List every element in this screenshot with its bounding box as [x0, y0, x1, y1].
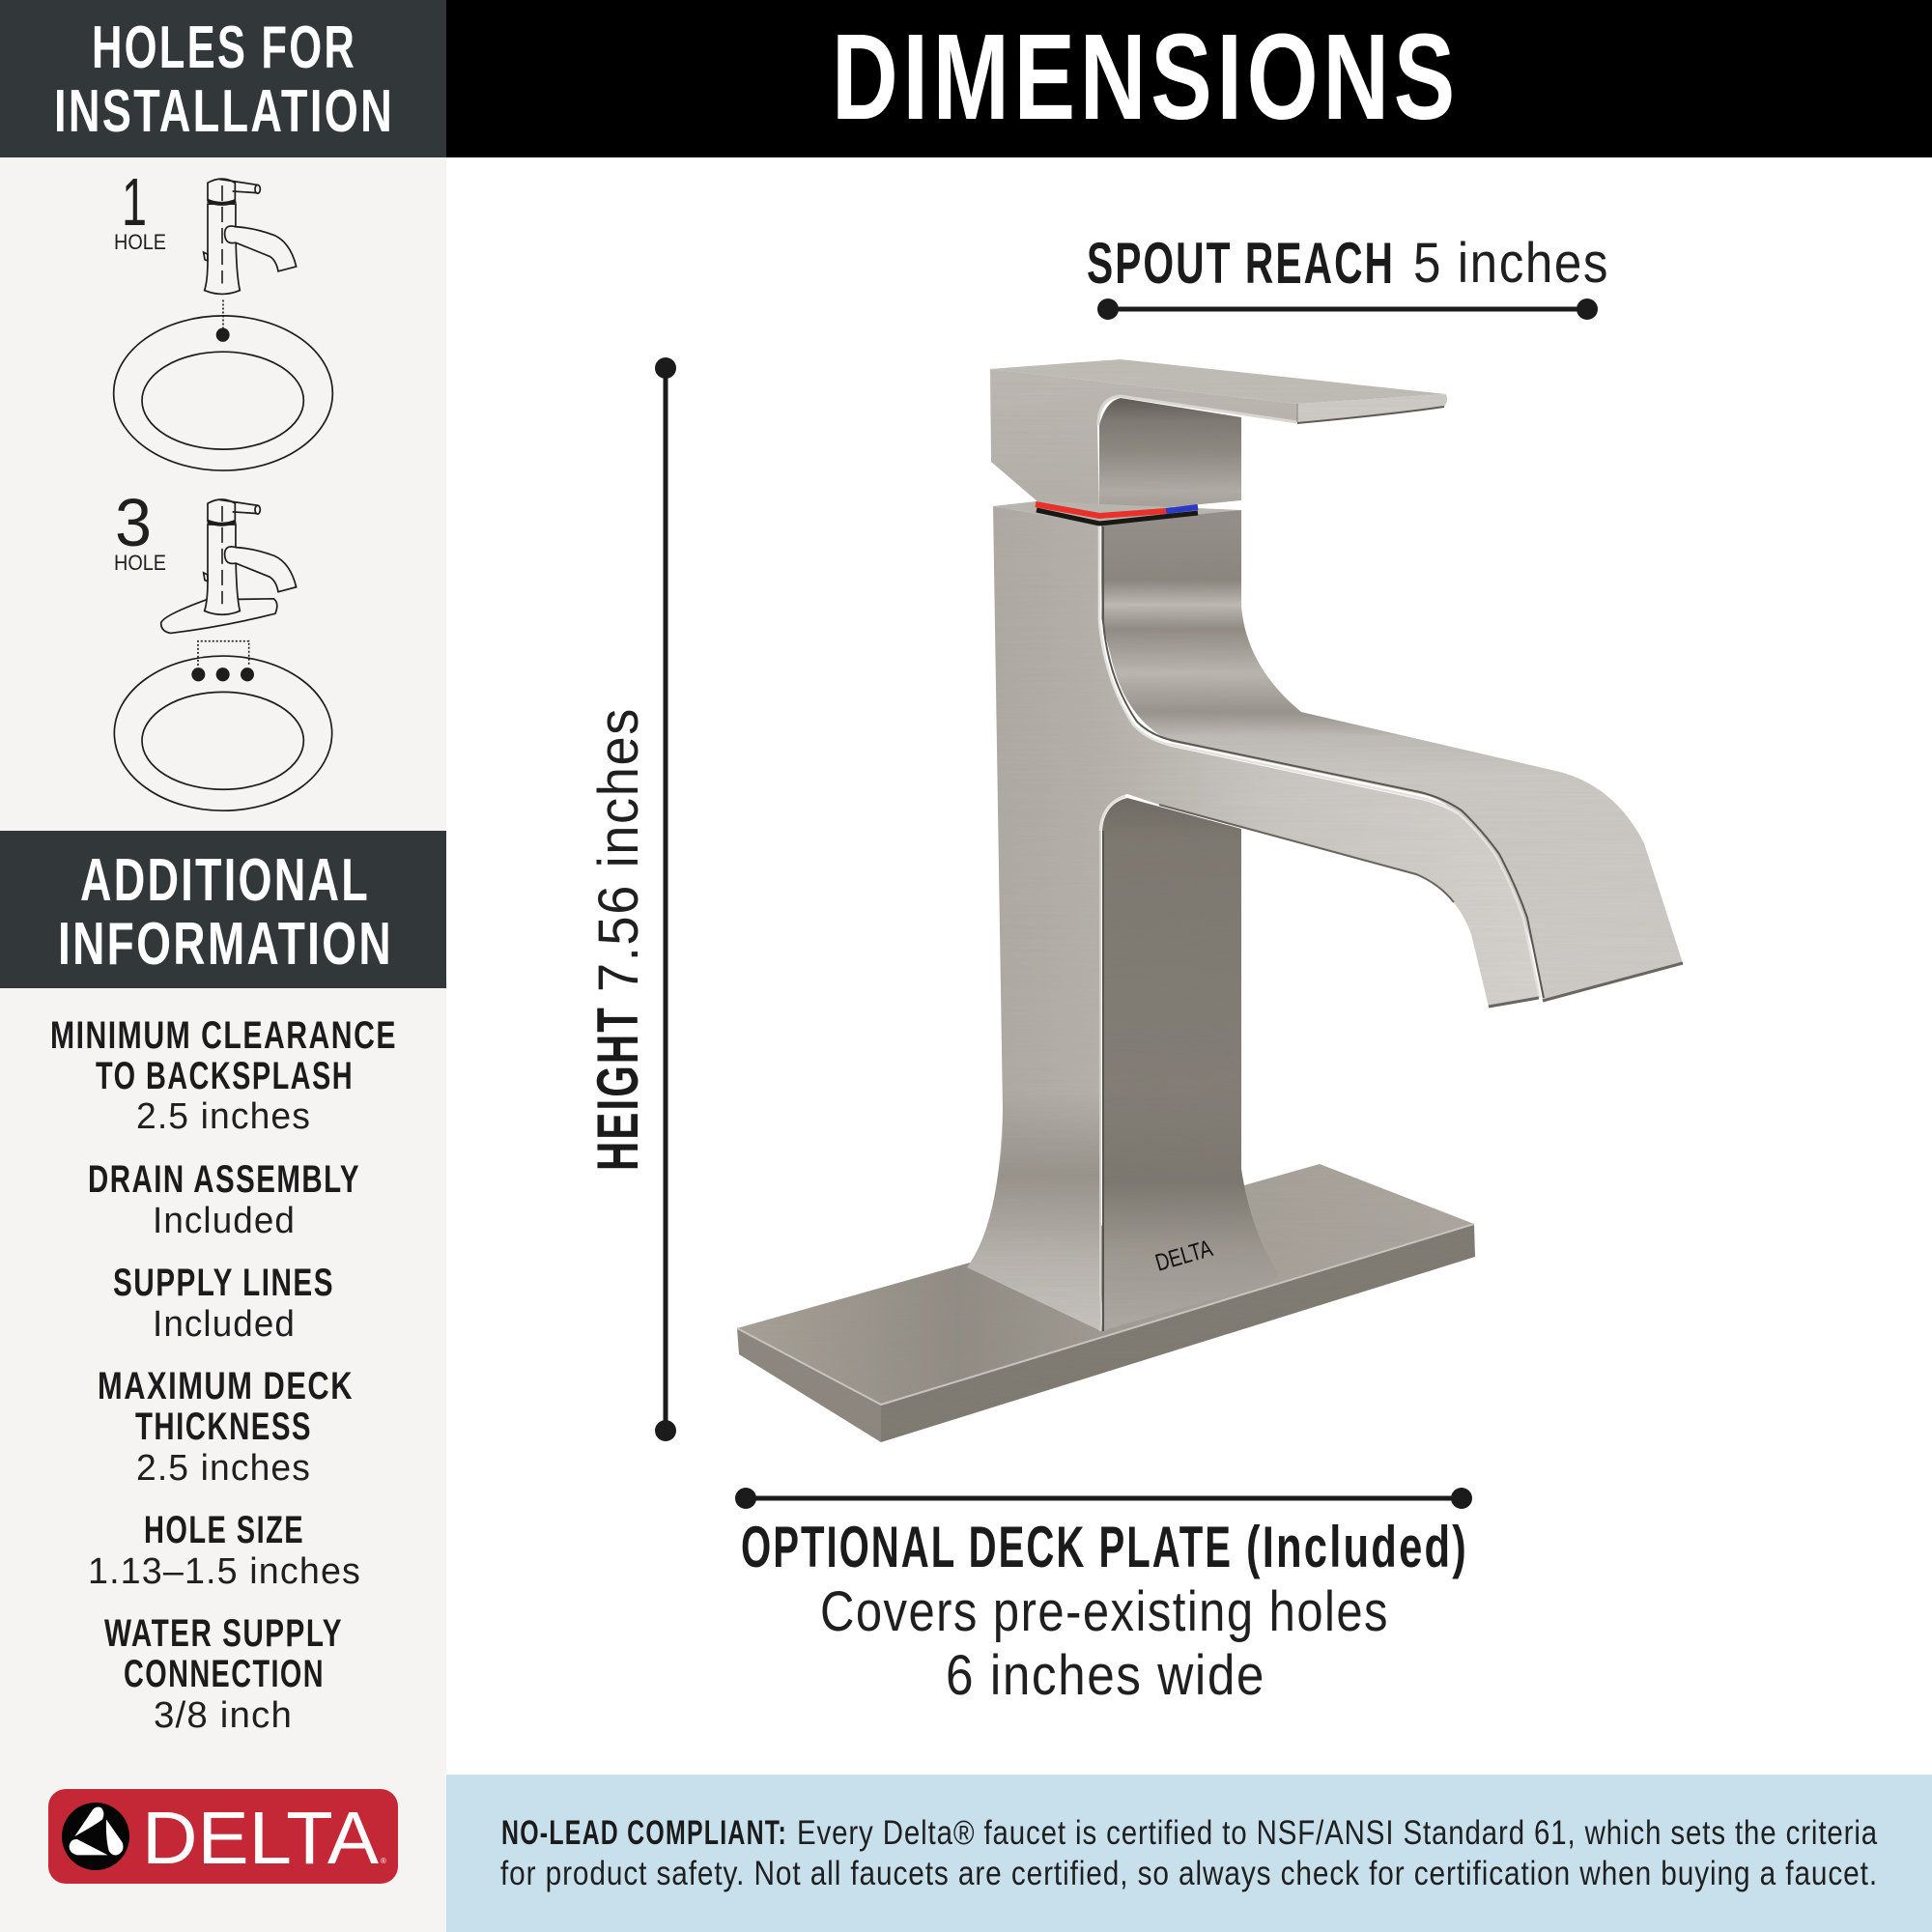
logo: Delta: DELTA — [142, 1797, 380, 1880]
three hole label: 3 — [115, 485, 152, 560]
body flare highlight — [967, 1092, 1101, 1331]
icon: three hole sink — [114, 641, 332, 810]
spec: water supply connection: CONNECTION — [124, 1653, 325, 1695]
deck plate dimension: 6 inches wide — [946, 1644, 1265, 1707]
one hole label: 1 — [122, 164, 147, 240]
logo: Delta — [48, 1789, 398, 1884]
heading: holes for installation — [0, 0, 446, 157]
icon: one hole sink — [114, 316, 332, 470]
handle lever — [990, 369, 1297, 512]
faucet edge highlights — [1098, 396, 1683, 1331]
spec: maximum deck thickness: 2.5 inches — [136, 1448, 311, 1489]
spec: water supply connection: 3/8 inch — [154, 1695, 293, 1736]
logo: Delta: ® — [381, 1857, 386, 1865]
heading: holes for installation: INSTALLATION — [54, 78, 394, 145]
three hole label: HOLE — [114, 551, 166, 575]
one hole label: HOLE — [114, 230, 166, 254]
spec: minimum clearance: MINIMUM CLEARANCE — [50, 1014, 397, 1057]
heading: holes for installation: HOLES FOR — [92, 14, 356, 81]
icon: one hole faucet — [204, 179, 297, 328]
spec: minimum clearance: TO BACKSPLASH — [96, 1055, 354, 1097]
no-lead compliance note — [446, 1775, 1932, 1932]
spec: maximum deck thickness: MAXIMUM DECK — [98, 1365, 354, 1407]
faucet upper column and spout top — [1101, 510, 1683, 1001]
three hole label — [114, 485, 166, 575]
one hole label — [114, 164, 166, 254]
height dimension — [585, 357, 676, 1441]
no-lead compliance note: NO-LEAD COMPLIANT: — [501, 1814, 787, 1852]
spec: hole size: 1.13–1.5 inches — [88, 1551, 361, 1592]
spec: water supply connection — [104, 1612, 343, 1736]
spec: water supply connection: WATER SUPPLY — [104, 1612, 343, 1655]
faucet photo illustration — [737, 359, 1683, 1442]
heading: additional information — [0, 831, 446, 988]
spec: maximum deck thickness: THICKNESS — [135, 1406, 312, 1448]
deck plate — [737, 1164, 1475, 1442]
height dimension: HEIGHT — [585, 1006, 650, 1171]
height dimension: 7.56 inches — [587, 707, 650, 992]
left sidebar background — [0, 0, 446, 1932]
temperature indicator — [993, 501, 1241, 525]
faucet lower column — [1102, 798, 1278, 1331]
brand mark: DELTA — [1152, 1235, 1216, 1277]
deck plate dimension: (Included) — [1246, 1515, 1468, 1579]
spec: maximum deck thickness — [98, 1365, 354, 1489]
spec: drain assembly: DRAIN ASSEMBLY — [88, 1158, 360, 1201]
title bar — [446, 0, 1932, 157]
spout reach dimension: 5 inches — [1413, 232, 1609, 295]
spec: drain assembly: Included — [153, 1201, 296, 1241]
spout reach dimension: SPOUT REACH — [1087, 231, 1395, 296]
heading: additional information: INFORMATION — [58, 911, 393, 978]
spec: minimum clearance — [50, 1014, 397, 1137]
handle block — [1099, 398, 1241, 514]
title bar: DIMENSIONS — [832, 9, 1460, 145]
spec: supply lines — [113, 1262, 334, 1345]
spec: minimum clearance: 2.5 inches — [136, 1096, 311, 1137]
faucet body front and spout face — [967, 506, 1539, 1331]
icon: three hole faucet with deck plate — [161, 499, 297, 633]
spout reach dimension — [1087, 231, 1609, 320]
deck plate dimension: Covers pre-existing holes — [820, 1580, 1389, 1643]
deck plate dimension — [735, 1488, 1472, 1707]
spec: supply lines: Included — [153, 1304, 296, 1345]
spec: hole size: HOLE SIZE — [144, 1509, 304, 1551]
spec: drain assembly — [88, 1158, 360, 1241]
heading: additional information: ADDITIONAL — [80, 847, 370, 914]
spec: supply lines: SUPPLY LINES — [113, 1262, 334, 1304]
deck plate dimension: OPTIONAL DECK PLATE — [741, 1515, 1233, 1579]
spec: hole size — [88, 1509, 361, 1592]
